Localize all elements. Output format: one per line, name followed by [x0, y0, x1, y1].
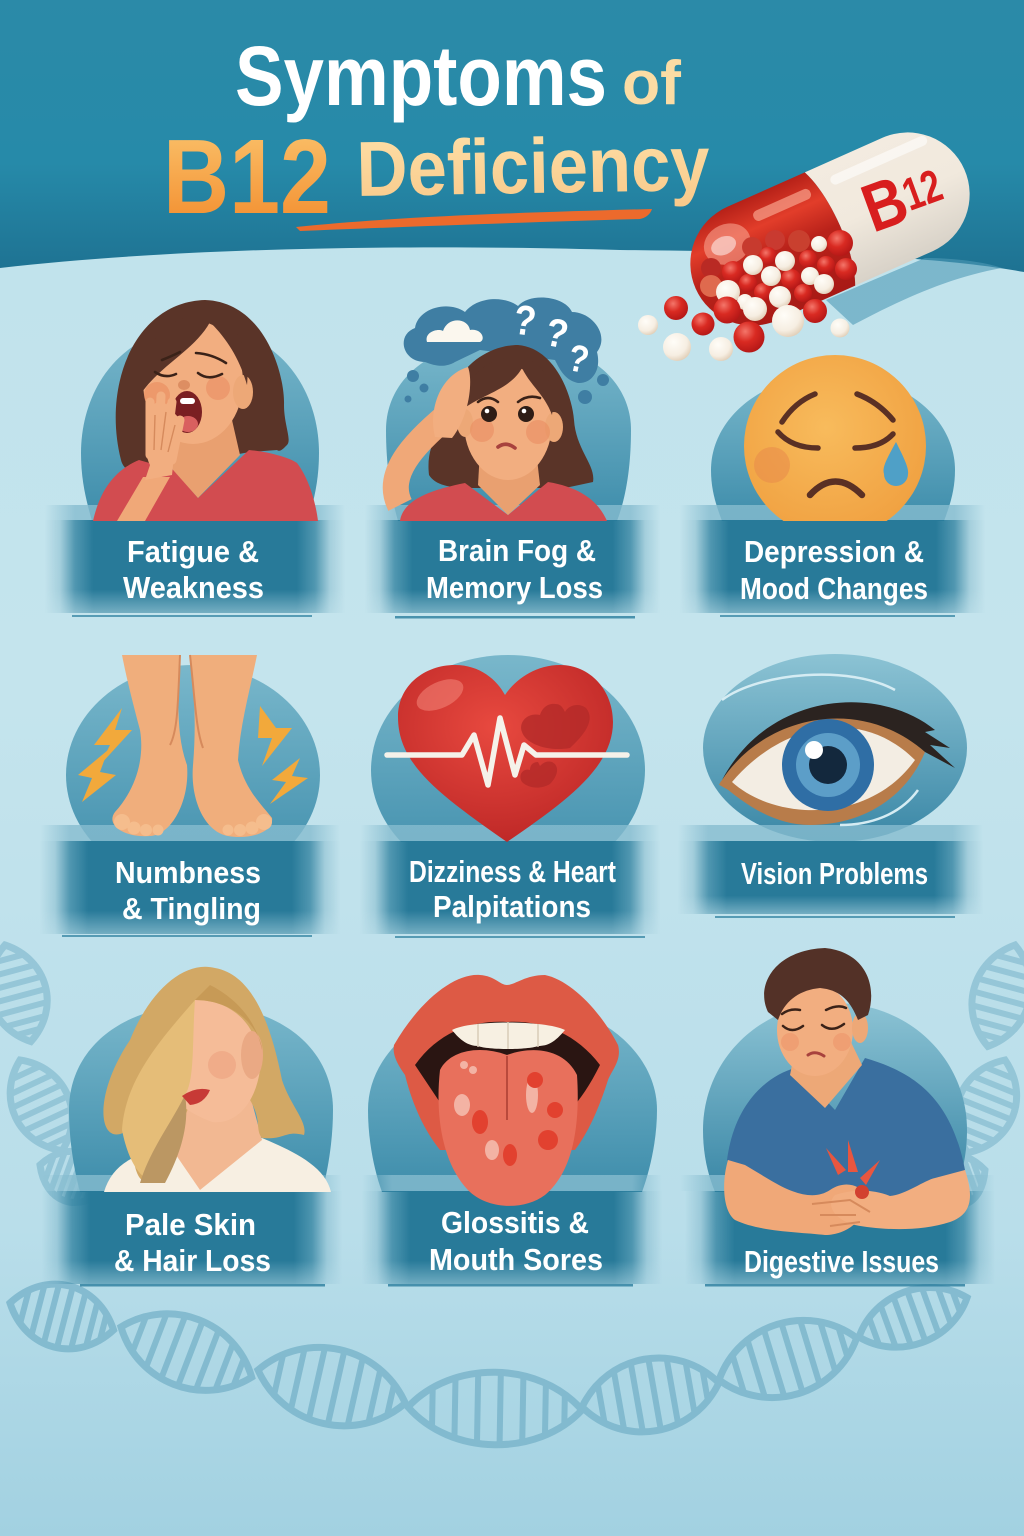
- capsule B12 label: B: [852, 161, 918, 247]
- label banner: [360, 825, 660, 938]
- capsule body: [670, 113, 990, 345]
- label text: [123, 534, 264, 605]
- illustration: woman with blond hair: [103, 967, 331, 1192]
- backdrop circle: [81, 325, 319, 521]
- capsule B12 label: 12: [895, 159, 949, 221]
- icon: sad face: [744, 355, 926, 537]
- label text: [114, 1207, 271, 1278]
- label text: Memory Loss: [426, 570, 603, 605]
- label banner: [362, 1175, 662, 1286]
- panel: digestive issues: [680, 948, 995, 1286]
- label text: Brain Fog &: [438, 533, 596, 568]
- DNA helix: left side: [0, 938, 114, 1213]
- icon: heart with ECG line: [387, 665, 627, 842]
- spilled beads: [638, 280, 850, 361]
- panel: depression and mood changes: [680, 355, 985, 617]
- title: [163, 29, 710, 236]
- illustration: man holding stomach: [724, 948, 970, 1235]
- label text: & Tingling: [122, 891, 261, 926]
- icon: thought cloud with question marks: ?: [511, 296, 539, 345]
- label banner: [40, 825, 340, 937]
- panel: dizziness and heart palpitations: [360, 655, 660, 938]
- label text: Vision Problems: [741, 856, 928, 891]
- backdrop circle: [711, 375, 955, 521]
- DNA helix: bottom: [2, 1273, 976, 1446]
- label text: Pale Skin: [125, 1207, 256, 1242]
- title underline: [296, 209, 652, 231]
- label banner: [42, 1175, 342, 1286]
- DNA helix: right side: [920, 938, 1024, 1214]
- capsule with spilled beads: [638, 113, 1002, 361]
- icon: thought cloud with question marks: ?: [541, 310, 572, 358]
- label banner: [680, 1175, 995, 1286]
- label banner: [45, 505, 345, 617]
- label text: Mouth Sores: [429, 1242, 603, 1277]
- label banner: [680, 505, 985, 617]
- panel: numbness and tingling: [40, 655, 340, 937]
- panel: fatigue and weakness: [45, 300, 345, 617]
- label text: Weakness: [123, 570, 264, 605]
- label text: Mood Changes: [740, 571, 928, 606]
- capsule shadow: [826, 258, 1002, 325]
- label text: [115, 855, 261, 926]
- backdrop circle: [371, 655, 645, 842]
- panel: pale skin and hair loss: [42, 967, 342, 1286]
- label text: Depression &: [744, 534, 924, 569]
- label text: Numbness: [115, 855, 261, 890]
- illustration: confused woman: [396, 345, 607, 521]
- capsule B12 label: [852, 148, 953, 247]
- panel: glossitis and mouth sores: [362, 975, 662, 1286]
- icon: thought cloud with question marks: ?: [564, 337, 593, 382]
- label text: Palpitations: [433, 889, 591, 924]
- illustration: open mouth and tongue: [394, 975, 619, 1206]
- header band: [0, 0, 1024, 272]
- backdrop circle: [368, 1000, 657, 1192]
- title line: B12 Deficiency: B12: [163, 118, 331, 236]
- label text: & Hair Loss: [114, 1243, 271, 1278]
- icon: lightning bolts: [78, 706, 308, 804]
- label banner: [678, 825, 983, 918]
- title line: B12 Deficiency: [163, 118, 710, 236]
- panel: brain fog and memory loss: [365, 296, 660, 618]
- backdrop circle: [703, 1003, 967, 1192]
- backdrop circle: [386, 340, 631, 521]
- backdrop circle: [66, 665, 320, 841]
- illustration: feet: [112, 655, 272, 837]
- title line: Symptoms of: Symptoms: [235, 29, 607, 123]
- backdrop circle: [703, 654, 967, 842]
- label text: Glossitis &: [441, 1205, 589, 1240]
- title line: B12 Deficiency: Deficiency: [356, 119, 710, 213]
- label text: [409, 854, 616, 924]
- illustration: yawning woman: [93, 300, 318, 521]
- beads inside capsule: [700, 230, 857, 302]
- label text: [429, 1205, 603, 1277]
- label banner: [365, 505, 660, 618]
- label text: [426, 533, 603, 605]
- panel: vision problems: [678, 654, 983, 918]
- icon: eye: [720, 675, 955, 825]
- icon: thought cloud with question marks: [404, 296, 609, 404]
- label text: [740, 534, 928, 606]
- label text: Dizziness & Heart: [409, 854, 616, 889]
- label text: Digestive Issues: [744, 1244, 939, 1279]
- title line: Symptoms of: of: [622, 49, 681, 118]
- label text: Fatigue &: [127, 534, 259, 569]
- backdrop circle: [69, 1005, 333, 1192]
